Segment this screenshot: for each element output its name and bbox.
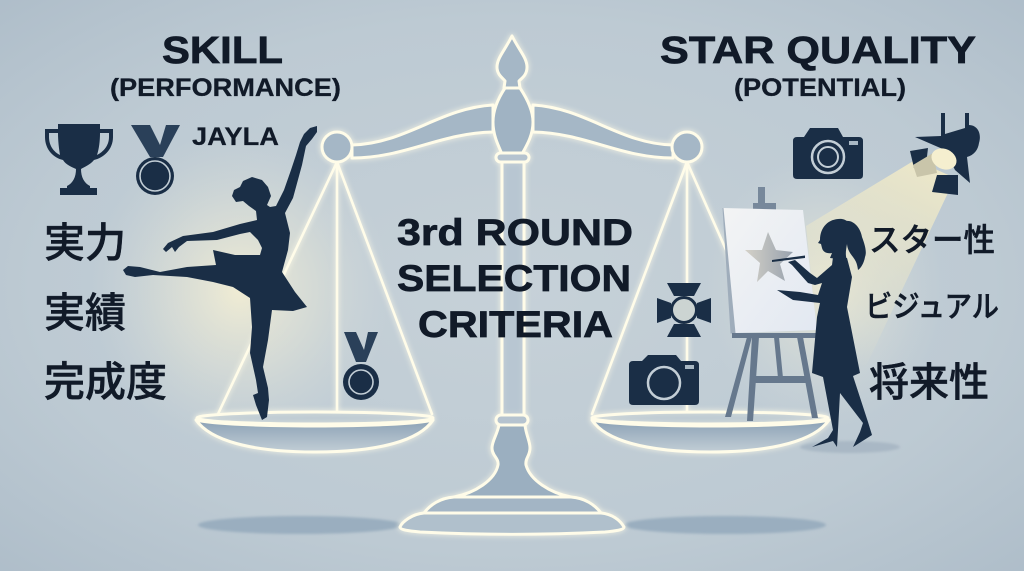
keyword 2: ビジュアル [865, 291, 999, 324]
canvas edge [723, 208, 735, 333]
ponytail [846, 221, 866, 270]
spotlight beam [806, 160, 955, 400]
medal disc [343, 364, 379, 400]
keyword 3: 将来性 [869, 361, 989, 405]
base tiers [424, 497, 601, 513]
central body [493, 88, 533, 154]
heading: star quality: STAR QUALITY [660, 30, 976, 72]
easel clip [753, 203, 776, 210]
left pan [196, 420, 433, 452]
bottom flap [667, 324, 701, 337]
balance scale [196, 36, 829, 534]
title line 1: 3rd ROUND [397, 212, 633, 253]
painted star [745, 232, 793, 282]
pivot left [322, 132, 352, 162]
camera body [793, 128, 863, 179]
glow behind painter [705, 150, 945, 430]
keyword 1: スター性 [869, 222, 995, 258]
finial [497, 36, 527, 88]
keyword 3: 完成度 [44, 359, 167, 405]
strings left [218, 162, 432, 414]
head [818, 219, 853, 260]
subheading: potential: (POTENTIAL) [734, 74, 906, 102]
foot [454, 425, 571, 497]
barn door bottom [932, 175, 958, 195]
camera lens inner [818, 147, 838, 167]
strings right [592, 162, 735, 414]
right flap [697, 298, 711, 323]
camera flash [849, 141, 858, 145]
paint brush [772, 256, 805, 262]
icon: medal top [131, 125, 180, 195]
easel [723, 187, 818, 421]
top flap [667, 283, 701, 296]
camera flash [685, 365, 694, 369]
glow behind ballerina [90, 130, 390, 450]
lens [928, 144, 960, 174]
icon: camera in pan [629, 355, 699, 405]
right pan [592, 420, 829, 452]
medal disc [136, 157, 174, 195]
star quality keywords [865, 222, 999, 405]
center title [397, 212, 633, 345]
base plinth [400, 513, 624, 534]
lens ring [672, 298, 696, 322]
floor shadow right [624, 516, 826, 534]
camera body [629, 355, 699, 405]
left pan rim [197, 412, 433, 424]
title line 2: SELECTION [397, 258, 631, 299]
ribbon [131, 125, 180, 157]
painter silhouette [772, 219, 872, 447]
skill keywords [44, 220, 167, 405]
medal ring [349, 370, 373, 394]
label: jayla: JAYLA [192, 123, 279, 151]
medal ring [140, 161, 170, 191]
easel legs [725, 337, 818, 421]
painter floor shadow [800, 441, 900, 453]
easel mast [758, 187, 765, 207]
lower collar [496, 415, 528, 425]
subheading: performance: (PERFORMANCE) [110, 74, 341, 102]
title line 3: CRITERIA [418, 304, 613, 345]
right pan rim [592, 412, 828, 424]
keyword 1: 実力 [44, 220, 126, 266]
icon: spotlight top right [910, 113, 980, 195]
icon: medal in pan [343, 332, 379, 400]
beam left [352, 105, 493, 158]
camera lens [648, 367, 680, 399]
icon: camera top [793, 128, 863, 179]
floor shadow left [198, 516, 402, 534]
keyword 2: 実績 [44, 290, 126, 336]
ribbon [344, 332, 378, 362]
camera lens [812, 141, 844, 173]
heading: skill: SKILL [162, 30, 283, 72]
collar [496, 153, 529, 162]
easel tray [732, 333, 816, 338]
icon: trophy [45, 124, 113, 195]
barn door left [910, 148, 928, 168]
column [502, 161, 524, 416]
lens cone [913, 153, 937, 177]
icon: stage light in pan [657, 283, 711, 337]
light housing [915, 113, 980, 183]
left flap [657, 298, 671, 323]
canvas [723, 208, 817, 333]
pivot right [672, 132, 702, 162]
beam right [533, 105, 673, 158]
ballerina silhouette [123, 126, 317, 420]
body [777, 257, 872, 447]
